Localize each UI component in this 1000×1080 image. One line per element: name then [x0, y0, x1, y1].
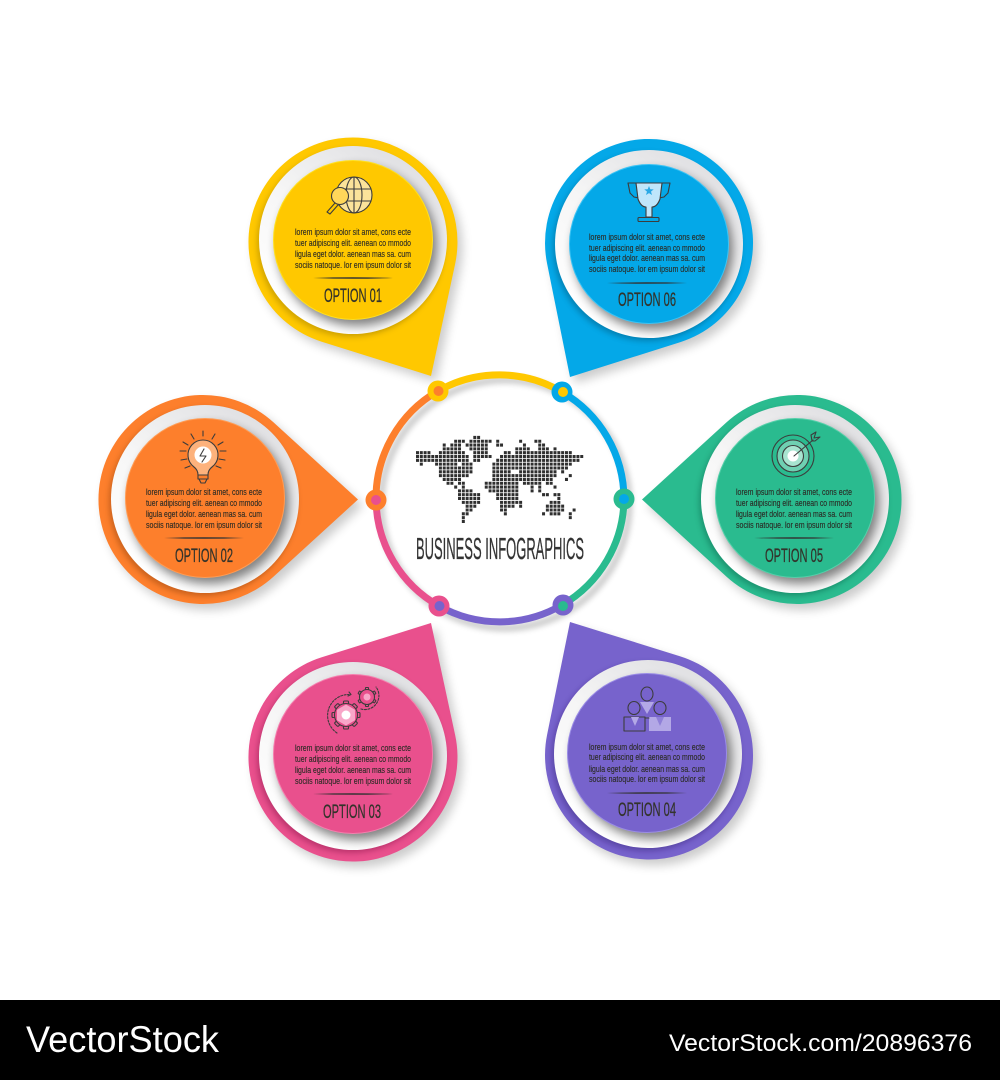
text: option 01 body: ligula eget dolor. aenean mas sa. cum [295, 249, 411, 259]
heading: option 04: OPTION 04 [618, 799, 676, 821]
icon: people [624, 687, 671, 731]
icon: gears [328, 687, 379, 733]
panel: option 05 [642, 395, 907, 610]
icon: target with arrow [772, 432, 820, 477]
icon: light bulb [180, 431, 226, 483]
text: BUSINESS INFOGRAPHICS [416, 531, 584, 566]
text: option 02 body: sociis natoque. lor em ipsum dolor sit [146, 520, 262, 530]
central ring [366, 375, 634, 628]
icon: trophy [628, 183, 670, 222]
text: option 02 body: ligula eget dolor. aenean mas sa. cum [146, 509, 262, 519]
text: option 01 body: tuer adipiscing elit. aenean co mmodo [295, 238, 411, 248]
footer image id: VectorStock.com/20896376 [669, 1030, 972, 1057]
node: top right [552, 382, 572, 402]
node: left [366, 490, 386, 510]
panel: option 03 [248, 623, 462, 868]
text: option 03 body [295, 743, 411, 786]
text: option 04 body: ligula eget dolor. aenean mas sa. cum [589, 764, 705, 774]
text: option 02 body: lorem ipsum dolor sit amet, cons ecte [146, 487, 262, 497]
text: option 04 body: tuer adipiscing elit. aenean co mmodo [589, 752, 705, 762]
heading: option 03: OPTION 03 [323, 801, 381, 823]
text: option 04 body: lorem ipsum dolor sit amet, cons ecte [589, 742, 705, 752]
text: option 01 body: sociis natoque. lor em ipsum dolor sit [295, 260, 411, 270]
footer logo text: VectorStock [26, 1019, 219, 1060]
text: option 02 body: tuer adipiscing elit. aenean co mmodo [146, 498, 262, 508]
heading: option 06: OPTION 06 [618, 289, 676, 311]
text: option 06 body [589, 232, 705, 274]
panel: option 04 [545, 622, 758, 866]
text: option 05 body: lorem ipsum dolor sit amet, cons ecte [736, 487, 852, 497]
text: option 02 body [146, 487, 262, 530]
node: bottom left [428, 596, 450, 616]
text: option 03 body: sociis natoque. lor em ipsum dolor sit [295, 776, 411, 786]
footer bar [0, 1000, 1000, 1080]
text: option 03 body: ligula eget dolor. aenean mas sa. cum [295, 765, 411, 775]
text: option 01 body: lorem ipsum dolor sit amet, cons ecte [295, 227, 411, 237]
heading: option 02: OPTION 02 [175, 545, 233, 567]
node: bottom right [552, 594, 574, 616]
text: option 05 body: sociis natoque. lor em ipsum dolor sit [736, 520, 852, 530]
dotted world map [416, 437, 584, 521]
text: option 06 body: lorem ipsum dolor sit amet, cons ecte [589, 232, 705, 242]
heading: option 01: OPTION 01 [324, 285, 382, 307]
node: right [614, 488, 634, 510]
icon: globe with magnifier [327, 177, 372, 214]
heading: option 05: OPTION 05 [765, 545, 823, 567]
text: option 06 body: ligula eget dolor. aenean mas sa. cum [589, 253, 705, 263]
text: option 04 body [589, 742, 705, 784]
text: option 05 body [736, 487, 852, 530]
node: top left [428, 380, 448, 402]
panel: option 02 [98, 395, 363, 610]
text: option 03 body: lorem ipsum dolor sit amet, cons ecte [295, 743, 411, 753]
text: option 04 body: sociis natoque. lor em ipsum dolor sit [589, 774, 705, 784]
text: option 05 body: tuer adipiscing elit. aenean co mmodo [736, 498, 852, 508]
text: option 01 body [295, 227, 411, 270]
text: option 03 body: tuer adipiscing elit. aenean co mmodo [295, 754, 411, 764]
panel: option 01 [248, 137, 462, 382]
text: option 06 body: tuer adipiscing elit. aenean co mmodo [589, 243, 705, 253]
text: option 06 body: sociis natoque. lor em ipsum dolor sit [589, 264, 705, 274]
panel: option 06 [545, 139, 758, 383]
text: option 05 body: ligula eget dolor. aenean mas sa. cum [736, 509, 852, 519]
